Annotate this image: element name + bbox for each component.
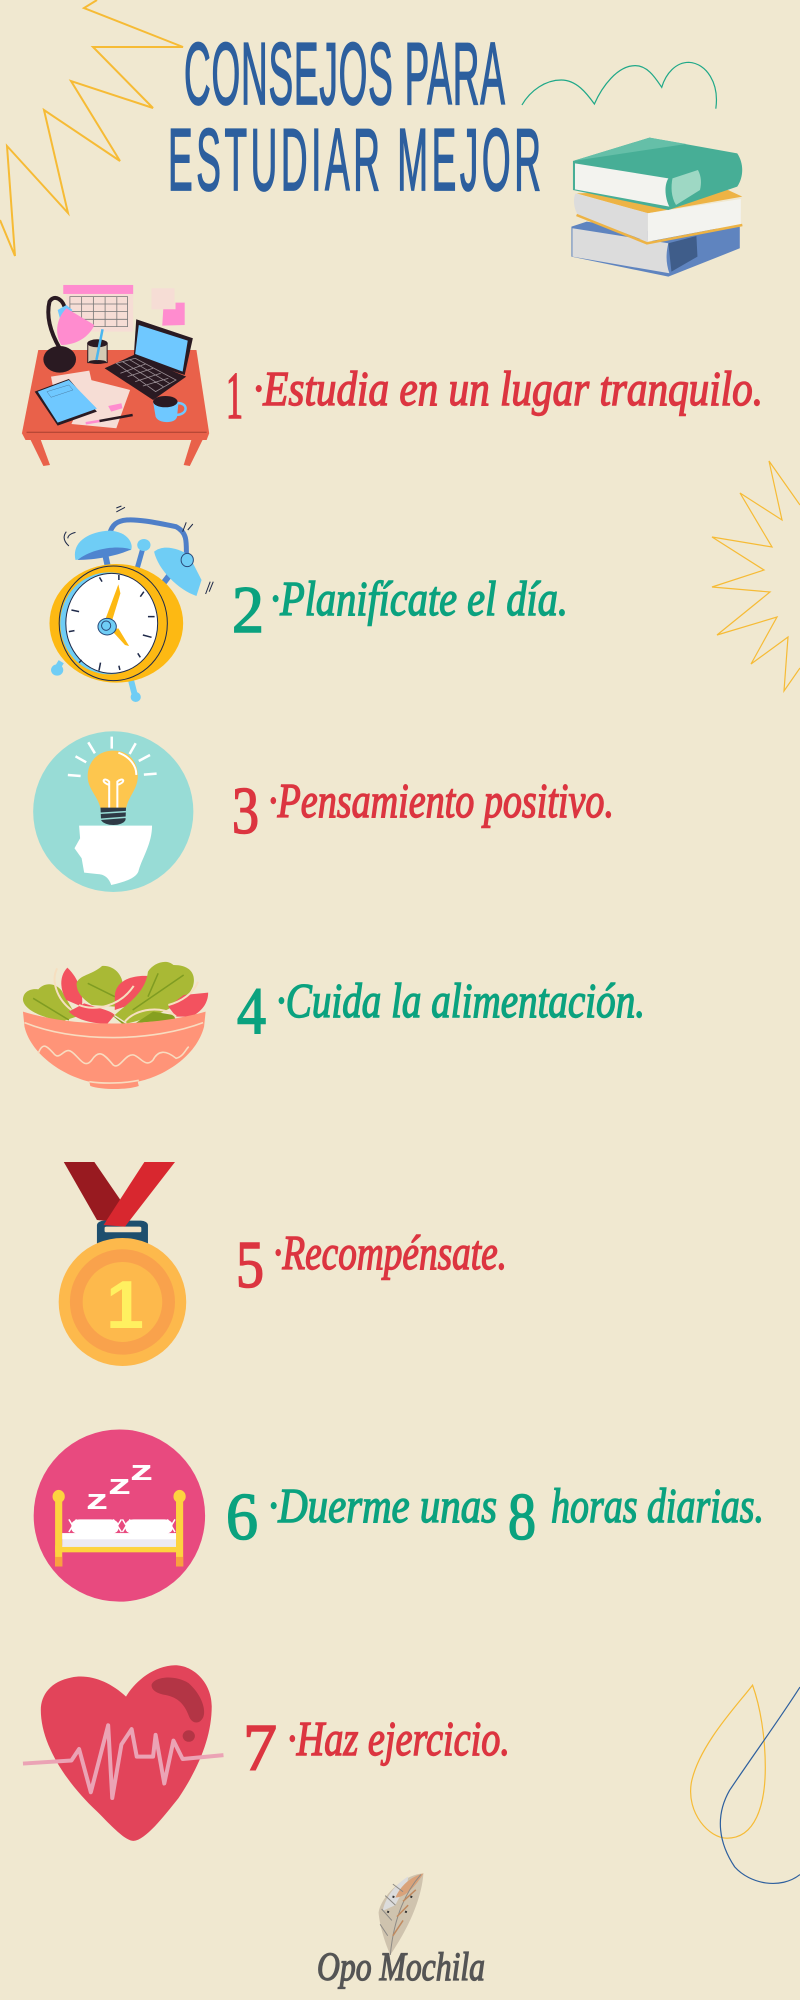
item 7: text: 7: [243, 1711, 277, 1785]
item 2: text: [232, 571, 568, 647]
item 1: desk icon: [22, 285, 209, 466]
decoration: green scribble arcs: [522, 62, 716, 109]
item 1: text: [226, 359, 763, 433]
decoration: yellow zigzag top left: [0, 0, 183, 256]
item 6: sleeping bed icon: z: [130, 1455, 153, 1487]
decoration: yellow star burst right: [712, 461, 800, 691]
item 7: text: [243, 1711, 510, 1785]
item 7: heart with pulse icon: [23, 1665, 223, 1841]
item 6: text: ·Duerme unas: [268, 1478, 497, 1533]
item 4: salad bowl icon: [23, 962, 208, 1089]
title: [168, 26, 541, 210]
item 5: text: ·Recompénsate.: [273, 1225, 507, 1280]
item 6: sleeping bed icon: z: [108, 1469, 131, 1501]
footer logo: feather and name: Opo Mochila: [317, 1944, 485, 1989]
item 3: text: [232, 773, 614, 848]
item 7: text: ·Haz ejercicio.: [287, 1711, 510, 1766]
icon: feather: [379, 1873, 423, 1955]
item 4: text: 4: [237, 974, 266, 1048]
item 3: text: 3: [232, 774, 259, 848]
decoration: yellow and blue loops bottom right: [691, 1685, 800, 1883]
title: CONSEJOS PARA: [184, 26, 505, 124]
item 5: text: [236, 1225, 507, 1302]
icon: stack of books: [571, 138, 742, 277]
item 6: sleeping bed icon: z: [86, 1484, 108, 1516]
item 5: medal icon: [59, 1162, 186, 1366]
item 2: text: 2: [232, 573, 264, 647]
item 1: text: 1: [226, 359, 243, 433]
item 5: medal icon: 1: [106, 1267, 144, 1343]
item 4: text: [237, 973, 645, 1048]
item 3: light bulb and head icon: [33, 731, 193, 892]
item 6: text: [226, 1478, 764, 1554]
item 3: text: ·Pensamiento positivo.: [268, 773, 614, 828]
item 4: text: ·Cuida la alimentación.: [276, 973, 645, 1028]
title: ESTUDIAR MEJOR: [168, 112, 541, 210]
item 6: text: 8: [508, 1480, 536, 1554]
item 6: text: 6: [226, 1480, 258, 1554]
footer logo: feather and name: [317, 1873, 485, 1989]
item 6: sleeping bed icon: [34, 1429, 205, 1602]
item 2: alarm clock icon: [49, 506, 213, 702]
item 5: text: 5: [236, 1228, 264, 1302]
item 2: text: ·Planifícate el día.: [270, 571, 568, 626]
